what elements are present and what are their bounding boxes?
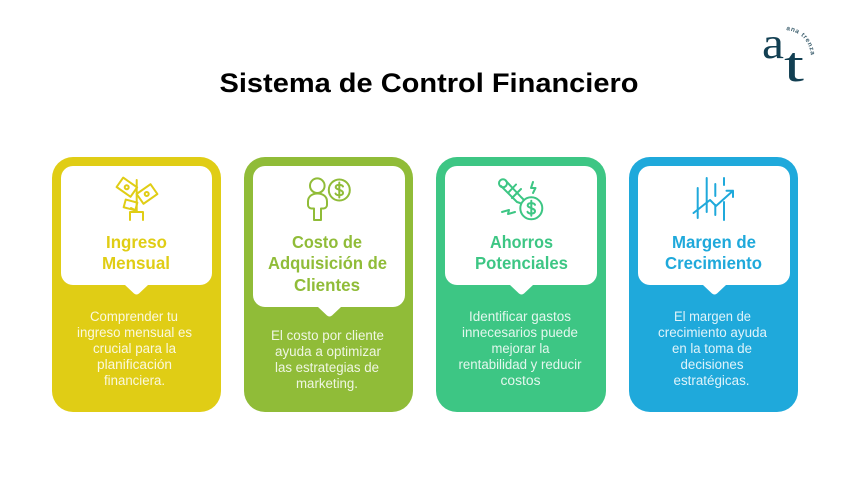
heading: Ingreso Mensual: [102, 232, 170, 273]
callout: Margen de Crecimiento: [638, 166, 790, 294]
heading: Margen de Crecimiento: [665, 232, 762, 273]
logo: ana trenza: a: [762, 19, 784, 68]
heading: Ahorros Potenciales: Potenciales: [475, 253, 568, 273]
text: Costo de Adquisición description: las estrategias de: [275, 360, 379, 375]
text: Margen de Crecimiento description: estratégicas.: [674, 373, 750, 388]
text: Margen de Crecimiento description: decisiones: [680, 357, 744, 372]
text: Margen de Crecimiento description: [658, 309, 767, 388]
text: Ahorros Potenciales description: rentabilidad y reducir: [458, 357, 582, 372]
text: Costo de Adquisición description: marketing.: [296, 376, 358, 391]
panel: Margen de Crecimiento: [629, 157, 798, 412]
panel: Costo de Adquisición de Clientes: [244, 157, 413, 412]
text: Ingreso Mensual description: crucial para la: [93, 341, 176, 356]
logo: ana trenza: [762, 19, 814, 92]
text: Ahorros Potenciales description: costos: [500, 373, 541, 388]
heading: Ahorros Potenciales: Ahorros: [490, 232, 553, 252]
text: Ahorros Potenciales description: innecesarios puede: [462, 325, 578, 340]
text: Ahorros Potenciales description: [458, 309, 582, 388]
heading: Margen de Crecimiento: Crecimiento: [665, 253, 762, 273]
text: Costo de Adquisición description: ayuda a optimizar: [275, 344, 381, 359]
heading: Costo de Adquisición de Clientes: Adquisición de: [268, 253, 387, 273]
text: Costo de Adquisición description: [271, 328, 384, 391]
heading: Margen de Crecimiento: Margen de: [672, 232, 756, 252]
logo: ana trenza: t: [784, 36, 804, 92]
heading: Costo de Adquisición de Clientes: Costo de: [292, 232, 362, 252]
text: Costo de Adquisición description: El costo por cliente: [271, 328, 384, 343]
text: Margen de Crecimiento description: El margen de: [674, 309, 751, 324]
title: Sistema de Control Financiero: [220, 68, 638, 98]
callout: Ingreso Mensual: [61, 166, 212, 294]
callout: Ahorros Potenciales: [445, 166, 597, 294]
logo: ana trenza: ana trenza: [786, 26, 814, 56]
panel: Ingreso Mensual: [52, 157, 221, 412]
heading: Ingreso Mensual: Mensual: [102, 253, 170, 273]
text: Ahorros Potenciales description: mejorar la: [492, 341, 550, 356]
icon: money plant: [117, 178, 157, 220]
heading: Ahorros Potenciales: [475, 232, 568, 273]
text: Ingreso Mensual description: planificación: [97, 357, 172, 372]
panel: Ahorros Potenciales: [436, 157, 606, 412]
text: Ingreso Mensual description: Comprender tu: [90, 309, 178, 324]
icon: client cost: [308, 178, 350, 220]
heading: Costo de Adquisición de Clientes: [268, 232, 387, 295]
text: Ingreso Mensual description: ingreso mensual es: [77, 325, 192, 340]
text: Ahorros Potenciales description: Identificar gastos: [469, 309, 571, 324]
text: Margen de Crecimiento description: crecimiento ayuda: [658, 325, 767, 340]
icon: growth chart: [694, 178, 733, 220]
heading: Costo de Adquisición de Clientes: Clientes: [294, 275, 360, 295]
text: Ingreso Mensual description: [77, 309, 192, 388]
text: Ingreso Mensual description: financiera.: [104, 373, 165, 388]
heading: Ingreso Mensual: Ingreso: [106, 232, 167, 252]
icon: cutting costs: [499, 179, 542, 219]
callout: Costo de Adquisición de Clientes: [253, 166, 405, 316]
text: Margen de Crecimiento description: en la toma de: [672, 341, 752, 356]
